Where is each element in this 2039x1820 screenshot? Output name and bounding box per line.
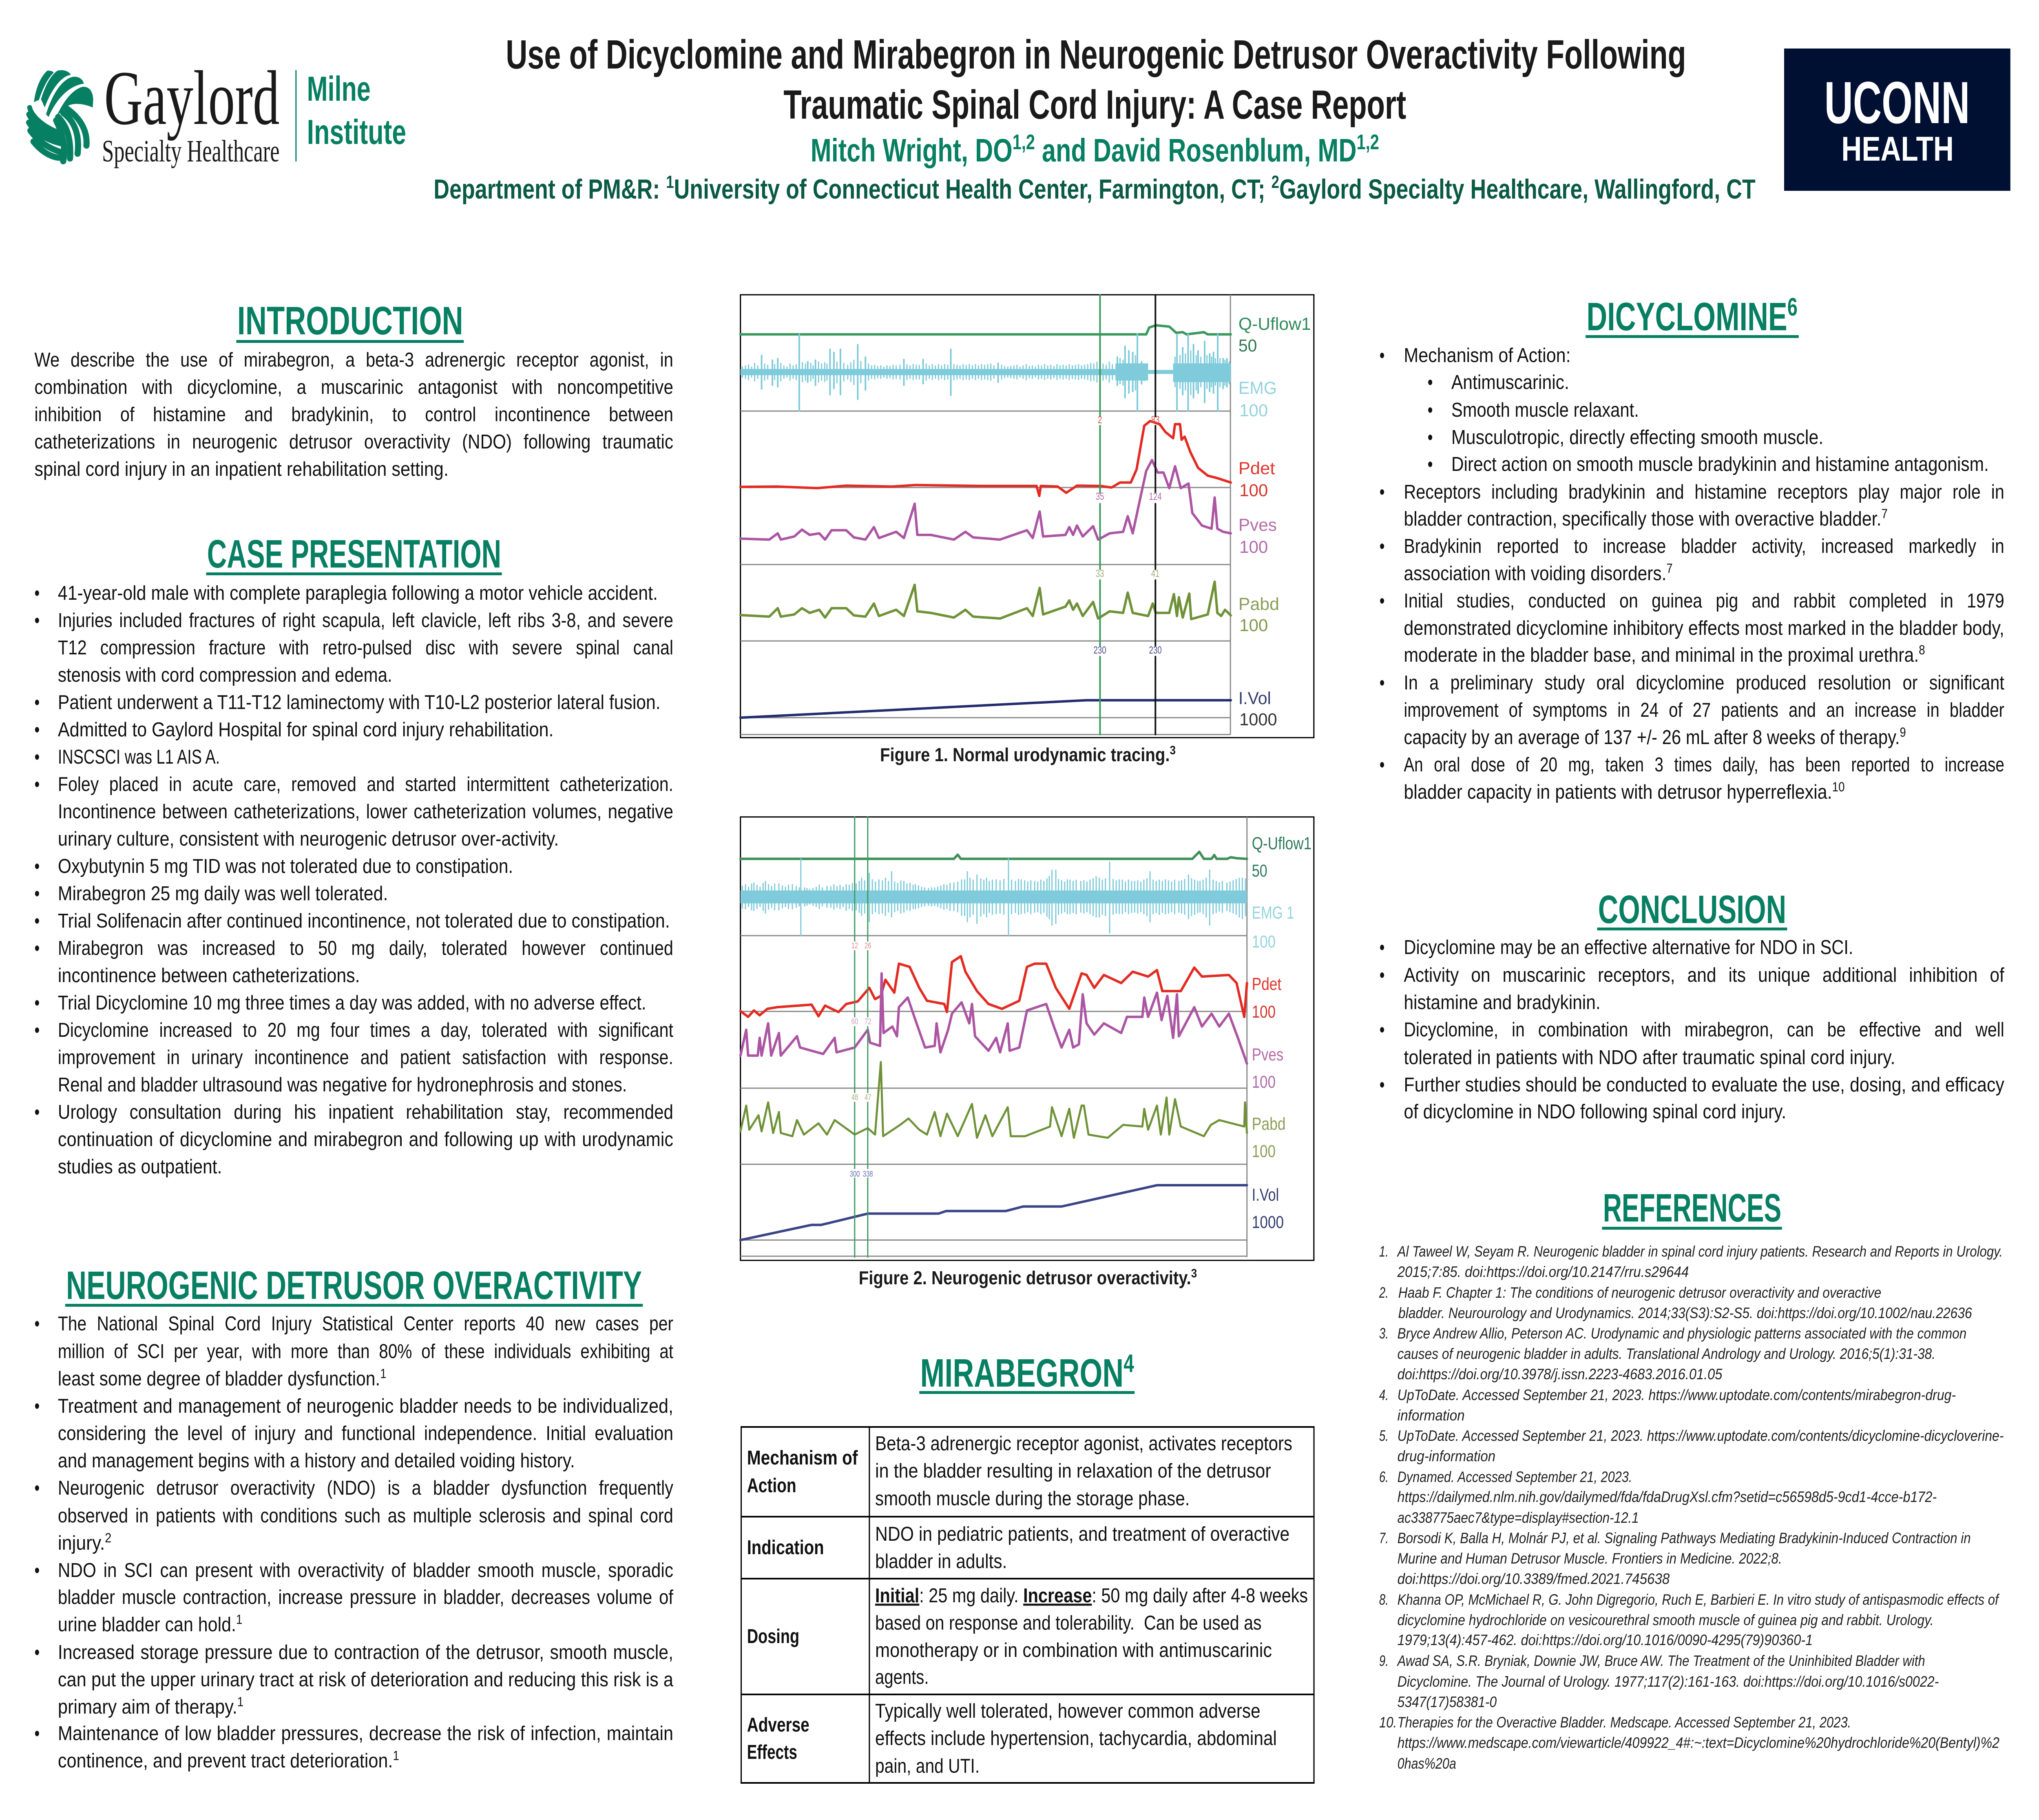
chart labels: figure 2 channels: 47 [865,1093,871,1102]
table row: dosing: agents. [875,1666,929,1688]
list: dicyclomine bullets: • [1428,453,1433,475]
table row: indication: bladder in adults. [875,1550,1007,1573]
caption: figure 2: Figure 2. Neurogenic detrusor overactivity. [859,1267,1143,1288]
list: dicyclomine bullets: bladder capacity in patients with detrusor hyperreflexia. [1404,781,1771,803]
list: case presentation bullets: • [34,582,40,604]
list: conclusion bullets: • [1380,1018,1385,1041]
list: dicyclomine bullets: bladder contraction, specifically those with overactive bladder. [1404,508,1816,530]
list: NDO bullets: injury. [58,1532,97,1554]
list: case presentation bullets: stenosis with cord compression and edema. [58,664,392,686]
text: introduction paragraph [34,349,673,480]
list: NDO bullets: Maintenance of low bladder pressures, decrease the risk of infection, maintain [58,1722,673,1745]
chart labels: figure 1 channels: Pves [1238,516,1277,535]
list: reference entries: https://www.medscape.com/viewarticle/409922_4#:~:text=Dicyclomine%20hydrochloride%20(Bentyl)%2 [1398,1734,1999,1751]
list: reference entries: 3. [1379,1325,1389,1342]
chart labels: figure 1 channels: 124 [1149,490,1162,502]
list: NDO bullets: urine bladder can hold. [58,1613,211,1636]
list: reference entries: Awad SA, S.R. Bryniak, Downie JW, Bruce AW. The Treatment of the Uninhibited Bladder with [1397,1652,1925,1669]
list: reference entries: 0has%20a [1398,1755,1456,1772]
list: NDO bullets: and management begins with a history and detailed voiding history. [58,1449,575,1472]
affiliations: Gaylord Specialty Healthcare, Wallingford, CT [1279,174,1756,205]
table row: mechanism of action: Beta-3 adrenergic receptor agonist, activates receptors [875,1432,1292,1455]
list: case presentation bullets: • [34,1101,40,1123]
table row: indication [747,1523,1289,1573]
list: conclusion bullets [1380,936,2005,1123]
chart labels: figure 2 channels: 60 [851,1017,858,1026]
list: conclusion bullets: Dicyclomine may be an effective alternative for NDO in SCI. [1404,936,1853,959]
table row: adverse effects: Effects [747,1741,797,1763]
table row: adverse effects [747,1700,1277,1777]
logo: Gaylord Specialty Healthcare Milne Institute [29,55,406,168]
table row: dosing: Dosing [747,1625,799,1648]
chart labels: figure 2 channels: Q-Uflow1 [1252,834,1311,853]
chart labels: figure 2 channels [850,834,1311,1232]
list: reference entries: 5. [1379,1427,1389,1444]
list: case presentation bullets: • [34,882,40,905]
chart: figure 2 traces [741,817,1314,1260]
list: NDO bullets: • [34,1312,40,1335]
figure 1: normal urodynamic tracing [741,295,1314,765]
list: NDO bullets: considering the level of injury and functional independence. Initial evaluation [58,1422,673,1445]
list: case presentation bullets: Oxybutynin 5 mg TID was not tolerated due to constipation. [58,855,513,877]
table: mirabegron summary [741,1427,1314,1783]
list: conclusion bullets: • [1380,1073,1385,1096]
chart labels: figure 2 channels: Pves [1252,1045,1283,1065]
list: conclusion bullets: Activity on muscarinic receptors, and its unique additional inhibition of [1404,964,2005,986]
list: case presentation bullets: Dicyclomine increased to 20 mg four times a day, tolerated with significant [58,1019,673,1041]
list: reference entries: UpToDate. Accessed September 21, 2023. https://www.uptodate.com/contents/mirabegron-drug- [1398,1386,1956,1403]
list: case presentation bullets [34,582,673,1178]
panel: case presentation [34,532,673,1178]
list: case presentation bullets: 41-year-old male with complete paraplegia following a motor vehicle accident. [58,582,658,604]
figure 2: neurogenic detrusor overactivity tracing [741,817,1314,1288]
table row: mechanism of action: smooth muscle during the storage phase. [875,1487,1190,1510]
list: case presentation bullets: Foley placed in acute care, removed and started intermittent catheterization. [58,773,673,795]
list: NDO bullets: • [34,1477,40,1499]
table row: adverse effects: effects include hypertension, tachycardia, abdominal [875,1727,1277,1749]
chart labels: figure 2 channels: 100 [1252,932,1276,952]
heading: mirabegron: MIRABEGRON [920,1352,1126,1396]
list: dicyclomine bullets: Antimuscarinic. [1451,371,1569,393]
heading: dicyclomine: 6 [1787,292,1798,321]
list: NDO bullets: continence, and prevent tract deterioration. [58,1749,344,1772]
list: case presentation bullets: Trial Solifenacin after continued incontinence, not tolerated due to constipation. [58,910,670,932]
list: NDO bullets: Treatment and management of neurogenic bladder needs to be individualized, [58,1395,673,1417]
affiliations: Department of PM&R: [433,174,648,205]
list: dicyclomine bullets: improvement of symptoms in 24 of 27 patients and an increase in bladder [1404,699,2004,721]
list: NDO bullets: 1 [393,1748,399,1763]
list: dicyclomine bullets: • [1380,753,1385,776]
list: case presentation bullets: T12 compression fracture with retro-pulsed disc with severe spinal canal [58,636,673,659]
chart labels: figure 1 channels: 2 [1098,414,1102,426]
list: dicyclomine bullets: • [1380,481,1385,503]
list: dicyclomine bullets: Mechanism of Action: [1404,344,1571,367]
chart labels: figure 2 channels: 50 [1252,861,1267,881]
panel: introduction [34,299,673,480]
chart labels: figure 1 channels: 100 [1239,481,1268,500]
list: reference entries: UpToDate. Accessed September 21, 2023. https://www.uptodate.com/contents/dicyclomine-dicycloverine- [1398,1427,2004,1444]
affiliations: 2 [1272,172,1279,192]
chart labels: figure 2 channels: 12 [851,941,858,950]
logo: UConn Health [1784,49,2010,191]
list: reference entries: doi:https://doi.org/10.3978/j.issn.2223-4683.2016.01.05 [1398,1365,1723,1383]
caption: figure 2: 3 [1191,1266,1197,1280]
wordmark: Gaylord: Gaylord [104,55,279,141]
heading: references: REFERENCES [1603,1186,1781,1230]
list: dicyclomine bullets: • [1428,399,1433,421]
list: reference entries: https://dailymed.nlm.nih.gov/dailymed/fda/fdaDrugXsl.cfm?setid=c56598d5-9cd1-4cce-b172- [1398,1488,1937,1505]
list: NDO bullets: • [34,1395,40,1417]
list: case presentation bullets: studies as outpatient. [58,1155,222,1178]
list: dicyclomine bullets: Musculotropic, directly effecting smooth muscle. [1451,426,1823,448]
chart labels: figure 2 channels: EMG 1 [1252,903,1294,923]
chart labels: figure 1 channels: 230 [1094,644,1106,656]
chart labels: figure 2 channels: 1000 [1252,1213,1284,1232]
list: NDO bullets: 1 [236,1612,242,1627]
table row: indication: Indication [747,1536,824,1559]
chart labels: figure 1 channels: 100 [1239,401,1268,420]
chart labels: figure 1 channels: I.Vol [1238,689,1271,708]
heading: introduction: INTRODUCTION [237,299,463,343]
authors: and David Rosenblum, MD [1035,132,1357,168]
list: dicyclomine bullets: An oral dose of 20 mg, taken 3 times daily, has been reported to increase [1404,753,2004,776]
list: reference entries: Dicyclomine. The Journal of Urology. 1977;117(2):161-163. doi:https://doi.org/10.1016/s0022- [1398,1673,1939,1690]
panel: mirabegron [741,1349,1314,1783]
chart labels: figure 1 channels: 100 [1239,538,1268,557]
chart labels: figure 1 channels: EMG [1238,379,1277,398]
list: conclusion bullets: Further studies should be conducted to evaluate the use, dosing, and efficacy [1404,1073,2004,1096]
list: reference entries: Al Taweel W, Seyam R. Neurogenic bladder in spinal cord injury patients. Research and Reports in Urology. [1397,1243,2003,1260]
affiliations: University of Connecticut Health Center, Farmington, CT; [674,174,1272,205]
chart labels: figure 1 channels: 33 [1096,568,1104,579]
table row: dosing: Initial: 25 mg daily. Increase : 50 mg daily after 4-8 weeks [875,1584,1308,1607]
list: case presentation bullets: continuation of dicyclomine and mirabegron and following up with urodynamic [58,1128,673,1151]
list: NDO bullets: bladder muscle contraction, increase pressure in bladder, decreases volume of [58,1586,674,1608]
heading: mirabegron: 4 [1123,1349,1134,1378]
heading: dicyclomine: DICYCLOMINE [1586,295,1793,339]
list: case presentation bullets: • [34,718,40,741]
title line 1: Use of Dicyclomine and Mirabegron in Neurogenic Detrusor Overactivity Following [506,31,1686,77]
wordmark: Specialty Healthcare: Specialty Healthcare [102,134,279,168]
list: reference entries: doi:https://doi.org/10.3389/fmed.2021.745638 [1398,1570,1670,1587]
list: dicyclomine bullets: Smooth muscle relaxant. [1451,399,1639,421]
list: reference entries: Khanna OP, McMichael R, G. John Digregorio, Ruch E, Barbieri E. In vitro study of antispasmodic effects of [1398,1591,1999,1608]
list: NDO bullets: Increased storage pressure due to contraction of the detrusor, smooth muscle, [58,1641,673,1663]
caption: figure 1: 3 [1170,743,1176,757]
list: conclusion bullets: of dicyclomine in NDO following spinal cord injury. [1404,1100,1786,1123]
panel: conclusion [1380,888,2005,1123]
chart labels: figure 2 channels: 100 [1252,1073,1276,1092]
chart labels: figure 1 channels [1094,315,1311,729]
list: case presentation bullets: incontinence between catheterizations. [58,964,360,987]
chart labels: figure 1 channels: 100 [1239,616,1268,635]
list: dicyclomine bullets: • [1380,535,1385,557]
list: conclusion bullets: histamine and bradykinin. [1404,991,1601,1014]
list: dicyclomine bullets: • [1428,426,1433,448]
list: case presentation bullets: Patient underwent a T11-T12 laminectomy with T10-L2 posterior lateral fusion. [58,691,661,713]
list: case presentation bullets: urinary culture, consistent with neurogenic detrusor over-activity. [58,828,559,850]
list: dicyclomine bullets: Receptors including bradykinin and histamine receptors play major role in [1404,481,2004,503]
list: conclusion bullets: Dicyclomine, in combination with mirabegron, can be effective and well [1404,1018,2004,1041]
list: dicyclomine bullets: capacity by an average of 137 +/- 26 mL after 8 weeks of therapy. [1404,726,1841,749]
list: NDO bullets: 1 [237,1694,243,1709]
list: reference entries: 2. [1379,1284,1389,1301]
text: introduction paragraph: We describe the use of mirabegron, a beta-3 adrenergic receptor agonist, in [34,349,673,371]
list: dicyclomine bullets [1380,344,2004,803]
authors: 1,2 [1357,130,1379,154]
list: NDO bullets: 1 [380,1366,387,1381]
text: introduction paragraph: spinal cord injury in an inpatient rehabilitation setting. [34,458,449,480]
list: reference entries: Therapies for the Overactive Bladder. Medscape. Accessed September 21, 2023. [1398,1714,1851,1731]
chart labels: figure 2 channels: 338 [863,1169,873,1179]
list: reference entries: Borsodi K, Balla H, Molnár PJ, et al. Signaling Pathways Mediating Bradykinin-Induced Contraction in [1398,1529,1971,1546]
list: case presentation bullets: • [34,910,40,932]
list: case presentation bullets: Admitted to Gaylord Hospital for spinal cord injury rehabilitation. [58,718,554,741]
chart labels: figure 2 channels: I.Vol [1252,1186,1279,1205]
chart labels: figure 1 channels: 35 [1096,490,1104,502]
chart labels: figure 1 channels: Pabd [1238,595,1279,614]
list: dicyclomine bullets: Bradykinin reported to increase bladder activity, increased markedly in [1404,535,2004,557]
list: reference entries: 1. [1379,1243,1389,1260]
chart labels: figure 1 channels: 83 [1151,414,1159,426]
list: conclusion bullets: tolerated in patients with NDO after traumatic spinal cord injury. [1404,1046,1895,1069]
list: case presentation bullets: Mirabegron was increased to 50 mg daily, tolerated however continued [58,937,673,959]
list: dicyclomine bullets: 7 [1881,506,1888,521]
list: NDO bullets: NDO in SCI can present with overactivity of bladder smooth muscle, sporadic [58,1559,673,1581]
list: case presentation bullets: • [34,855,40,877]
wordmark: Institute: Institute [307,113,406,151]
chart labels: figure 2 channels: 26 [865,941,871,950]
panel: references [1379,1186,2004,1772]
heading: case presentation: CASE PRESENTATION [207,532,501,576]
list: reference entries: 2015;7:85. doi:https://doi.org/10.2147/rru.s29644 [1397,1263,1689,1280]
table row: dosing: monotherapy or in combination with antimuscarinic [875,1639,1272,1661]
list: NDO bullets: Neurogenic detrusor overactivity (NDO) is a bladder dysfunction frequently [58,1477,673,1499]
list: dicyclomine bullets: 7 [1666,561,1673,576]
list: dicyclomine bullets: Initial studies, conducted on guinea pig and rabbit completed in 1979 [1404,590,2004,612]
list: reference entries: 9. [1379,1652,1389,1669]
list: dicyclomine bullets: • [1428,371,1433,393]
list: reference entries: ac338775aec7&type=display#section-12.1 [1398,1509,1639,1526]
wordmark: Milne: Milne [307,69,371,108]
list: reference entries: dicyclomine hydrochloride on vesicourethral smooth muscle of guinea pig and rabbit. Urology. [1398,1611,1934,1628]
chart labels: figure 2 channels: 100 [1252,1142,1276,1161]
list: dicyclomine bullets: 8 [1919,643,1925,657]
title line 2: Traumatic Spinal Cord Injury: A Case Report [783,82,1406,128]
table row: indication: NDO in pediatric patients, and treatment of overactive [875,1523,1289,1545]
list: reference entries: causes of neurogenic bladder in adults. Translational Andrology and Urology. 2016;5(1):31-38. [1398,1345,1935,1362]
heading: conclusion: CONCLUSION [1598,888,1786,932]
list: case presentation bullets: improvement in urinary incontinence and patient satisfaction with response. [58,1046,673,1069]
list: case presentation bullets: • [34,773,40,795]
list: dicyclomine bullets: moderate in the bladder base, and minimal in the proximal urethra. [1404,644,1848,666]
list: case presentation bullets: • [34,992,40,1014]
chart labels: figure 2 channels: 100 [1252,1003,1276,1022]
list: reference entries: information [1398,1407,1465,1424]
list: dicyclomine bullets: 10 [1832,780,1845,794]
list: reference entries: Bryce Andrew Allio, Peterson AC. Urodynamic and physiologic patterns associated with the common [1398,1325,1966,1342]
title block [433,31,1756,205]
list: case presentation bullets: • [34,1019,40,1041]
wordmark: HEALTH: HEALTH [1841,130,1954,168]
chart labels: figure 1 channels: 1000 [1239,710,1277,729]
table row: mechanism of action: Mechanism of [747,1447,858,1469]
chart labels: figure 1 channels: 41 [1151,568,1159,579]
table row: mechanism of action: Action [747,1474,796,1497]
list: dicyclomine bullets: In a preliminary study oral dicyclomine produced resolution or significant [1404,671,2004,694]
list: NDO bullets: 2 [105,1531,111,1545]
list: reference entries: Murine and Human Detrusor Muscle. Frontiers in Medicine. 2022;8. [1398,1550,1782,1567]
heading: neurogenic detrusor overactivity: NEUROGENIC DETRUSOR OVERACTIVITY [66,1264,642,1308]
panel: neurogenic detrusor overactivity [34,1264,674,1772]
table row: adverse effects: pain, and UTI. [875,1755,980,1777]
list: NDO bullets: The National Spinal Cord Injury Statistical Center reports 40 new cases per [58,1312,673,1335]
authors: Mitch Wright, DO [811,132,1008,168]
list: NDO bullets: • [34,1641,40,1663]
text: introduction paragraph: inhibition of histamine and bradykinin, to control incontinence between [34,403,673,426]
chart labels: figure 1 channels: 230 [1149,644,1162,656]
icon: green yarn swirl [29,70,93,161]
table row: adverse effects: Adverse [747,1714,809,1736]
list: reference entries: bladder. Neurourology and Urodynamics. 2014;33(S3):S2-S5. doi:https://doi.org/10.1002/nau.22636 [1398,1304,1973,1321]
list: case presentation bullets: INSCSCI was L1 AIS A. [58,746,220,768]
list: case presentation bullets: • [34,609,40,632]
list: NDO bullets: least some degree of bladder dysfunction. [58,1367,338,1390]
chart labels: figure 2 channels: Pdet [1252,975,1282,994]
caption: figure 1: Figure 1. Normal urodynamic tracing. [880,744,1128,765]
list: case presentation bullets: Incontinence between catheterizations, lower catheterization volumes, negative [58,800,673,823]
list: dicyclomine bullets: association with voiding disorders. [1404,562,1632,585]
list: NDO bullets: • [34,1722,40,1745]
list: dicyclomine bullets: demonstrated dicyclomine inhibitory effects most marked in the bladder body, [1404,617,2004,639]
chart: figure 1 traces [741,295,1314,738]
list: case presentation bullets: Urology consultation during his inpatient rehabilitation stay, recommended [58,1101,673,1123]
list: reference entries [1379,1243,2004,1772]
list: reference entries: 6. [1379,1468,1389,1485]
chart labels: figure 2 channels: 48 [851,1093,858,1102]
list: NDO bullets: primary aim of therapy. [58,1696,211,1718]
chart labels: figure 1 channels: Pdet [1238,459,1275,478]
list: reference entries: 5347(17)58381-0 [1398,1693,1497,1710]
list: reference entries: 4. [1379,1386,1389,1403]
chart labels: figure 1 channels: 50 [1238,336,1257,356]
wordmark: UCONN: UCONN [1824,70,1970,136]
list: case presentation bullets: • [34,746,40,768]
list: reference entries: drug-information [1398,1447,1495,1464]
list: case presentation bullets: Renal and bladder ultrasound was negative for hydronephrosis and stones. [58,1073,627,1096]
list: conclusion bullets: • [1380,936,1385,959]
panel: dicyclomine [1380,292,2004,803]
list: reference entries: 7. [1379,1529,1389,1546]
list: case presentation bullets: Injuries included fractures of right scapula, left clavicle, left ribs 3-8, and severe [58,609,673,632]
list: NDO bullets [34,1312,674,1772]
list: NDO bullets: • [34,1559,40,1581]
chart labels: figure 2 channels: 72 [865,1017,871,1026]
list: NDO bullets: can put the upper urinary tract at risk of deterioration and reducing this risk is a [58,1668,674,1691]
list: conclusion bullets: • [1380,964,1385,986]
list: reference entries: Dynamed. Accessed September 21, 2023. [1398,1468,1632,1485]
list: case presentation bullets: Trial Dicyclomine 10 mg three times a day was added, with no adverse effect. [58,992,646,1014]
table row: adverse effects: Typically well tolerated, however common adverse [875,1700,1261,1722]
list: case presentation bullets: • [34,937,40,959]
table row: dosing: based on response and tolerability. Can be used as [875,1612,1262,1634]
text: introduction paragraph: catheterizations in neurogenic detrusor overactivity (NDO) following traumatic [34,431,673,453]
list: reference entries: 8. [1379,1591,1389,1608]
chart labels: figure 2 channels: 300 [850,1169,860,1179]
list: dicyclomine bullets: • [1380,590,1385,612]
list: NDO bullets: million of SCI per year, with more than 80% of these individuals exhibiting at [58,1340,673,1363]
table row: dosing [747,1584,1308,1688]
list: NDO bullets: observed in patients with conditions such as multiple sclerosis and spinal cord [58,1504,673,1527]
list: reference entries: 10. [1379,1714,1397,1731]
list: dicyclomine bullets: • [1380,671,1385,694]
list: case presentation bullets: Mirabegron 25 mg daily was well tolerated. [58,882,388,905]
chart labels: figure 2 channels: Pabd [1252,1115,1286,1134]
authors: 1,2 [1013,130,1035,154]
list: reference entries: Haab F. Chapter 1: The conditions of neurogenic detrusor overactivity and overactive [1398,1284,1881,1301]
affiliations: 1 [666,172,674,192]
table row: mechanism of action: in the bladder resulting in relaxation of the detrusor [875,1460,1271,1482]
list: dicyclomine bullets: Direct action on smooth muscle bradykinin and histamine antagonism. [1451,453,1989,475]
list: reference entries: 1979;13(4):457-462. doi:https://doi.org/10.1016/0090-4295(79)90360-1 [1398,1631,1813,1648]
list: case presentation bullets: • [34,691,40,713]
chart labels: figure 1 channels: Q-Uflow1 [1238,315,1311,334]
list: dicyclomine bullets: • [1380,344,1385,367]
list: dicyclomine bullets: 9 [1900,725,1906,740]
table row: mechanism of action [747,1432,1292,1510]
text: introduction paragraph: combination with dicyclomine, a muscarinic antagonist with noncompetitive [34,376,673,398]
